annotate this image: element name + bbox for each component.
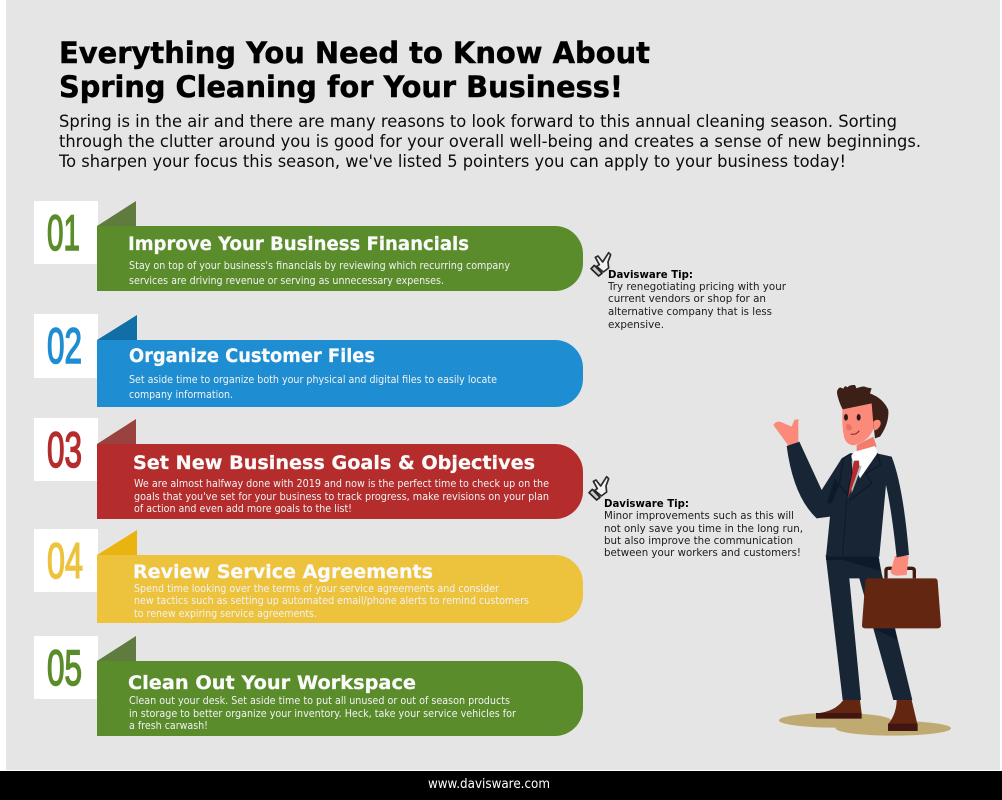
ribbon fold 03 xyxy=(97,419,136,444)
heading 04: Review Service Agreements xyxy=(133,561,433,583)
panel: step 04 xyxy=(34,529,583,623)
number box 04: 04 xyxy=(47,533,83,589)
illustration: businessman with briefcase xyxy=(773,385,951,736)
body 01: services are driving revenue or serving as unnecessary expenses. xyxy=(129,276,444,287)
tip 1: current vendors or shop for an xyxy=(608,292,766,305)
title: Spring Cleaning for Your Business! xyxy=(59,70,623,104)
body 01: Stay on top of your business's financials by reviewing which recurring company xyxy=(129,261,510,272)
number box 01: 01 xyxy=(47,205,80,261)
number box 01 xyxy=(34,201,98,264)
figure upper body xyxy=(773,385,909,560)
tip 1: Davisware Tip: xyxy=(608,268,693,281)
heading 05: Clean Out Your Workspace xyxy=(128,672,416,694)
ribbon fold 02 xyxy=(97,315,137,340)
tip 2: not only save you time in the long run, xyxy=(604,522,803,535)
intro text: Spring is in the air and there are many reasons to look forward to this annual cleaning season. Sorting xyxy=(59,112,897,131)
body 03 xyxy=(134,479,549,515)
icon: pointing hand 1 xyxy=(591,253,611,276)
body 02: company information. xyxy=(129,390,233,401)
intro text: To sharpen your focus this season, we've listed 5 pointers you can apply to your business today! xyxy=(58,152,846,171)
body 04: new tactics such as setting up automated email/phone alerts to remind customers xyxy=(134,596,529,607)
panel: step 03 xyxy=(34,418,583,519)
number box 02 xyxy=(34,314,98,378)
ribbon 05 xyxy=(97,661,583,736)
number box 04 xyxy=(34,529,98,592)
body 04 xyxy=(134,584,529,620)
body 02 xyxy=(129,375,497,401)
intro text xyxy=(58,112,921,171)
figure lower body xyxy=(779,555,951,736)
tip 1: alternative company that is less xyxy=(608,305,772,318)
ribbon 02 xyxy=(97,340,583,407)
ribbon 04 xyxy=(97,555,583,623)
tip 1: Try renegotiating pricing with your xyxy=(607,280,786,293)
ribbon 03 xyxy=(97,444,583,519)
panel: step 05 xyxy=(34,636,583,736)
body 05: Clean out your desk. Set aside time to put all unused or out of season products xyxy=(129,696,510,707)
body 03: goals that you've set for your business to track progress, make revisions on your plan xyxy=(134,492,549,503)
panel: step 02 xyxy=(34,314,583,407)
footer bar: www.davisware.com xyxy=(428,777,550,792)
tip 1: expensive. xyxy=(608,318,664,331)
ribbon fold 04 xyxy=(97,530,137,555)
number box 03 xyxy=(34,418,98,481)
number box 05 xyxy=(34,636,98,699)
body 05: in storage to better organize your inventory. Heck, take your service vehicles for xyxy=(129,709,517,720)
body 05: a fresh carwash! xyxy=(129,721,208,732)
body 05 xyxy=(129,696,517,732)
number box 03: 03 xyxy=(47,422,82,478)
ribbon fold 05 xyxy=(97,636,136,661)
body 04: Spend time looking over the terms of your service agreements and consider xyxy=(134,584,500,595)
body 01 xyxy=(129,261,510,287)
intro text: through the clutter around you is good for your overall well-being and creates a sense of new beginnings. xyxy=(59,132,921,151)
tip 2 xyxy=(604,497,803,559)
heading 03: Set New Business Goals & Objectives xyxy=(133,452,535,474)
title: Everything You Need to Know About xyxy=(59,36,650,70)
heading 02: Organize Customer Files xyxy=(129,345,375,367)
tip 2: Minor improvements such as this will xyxy=(604,509,794,522)
tip 2: between your workers and customers! xyxy=(604,546,801,559)
heading 01: Improve Your Business Financials xyxy=(128,233,469,255)
body 04: to renew expiring service agreements. xyxy=(134,609,317,620)
tip 1 xyxy=(607,268,786,331)
icon: pointing hand 2 xyxy=(589,477,609,500)
title xyxy=(59,36,650,104)
body 03: We are almost halfway done with 2019 and now is the perfect time to check up on the xyxy=(134,479,549,490)
ribbon 01 xyxy=(97,226,583,291)
tip 2: Davisware Tip: xyxy=(604,497,689,510)
tip 2: but also improve the communication xyxy=(604,534,793,547)
body 03: of action and even add more goals to the list! xyxy=(134,504,352,515)
number box 05: 05 xyxy=(47,640,82,696)
ribbon fold 01 xyxy=(97,201,136,226)
body 02: Set aside time to organize both your physical and digital files to easily locate xyxy=(129,375,497,386)
number box 02: 02 xyxy=(47,318,82,374)
panel: step 01 xyxy=(34,201,583,291)
footer bar xyxy=(0,771,1002,800)
